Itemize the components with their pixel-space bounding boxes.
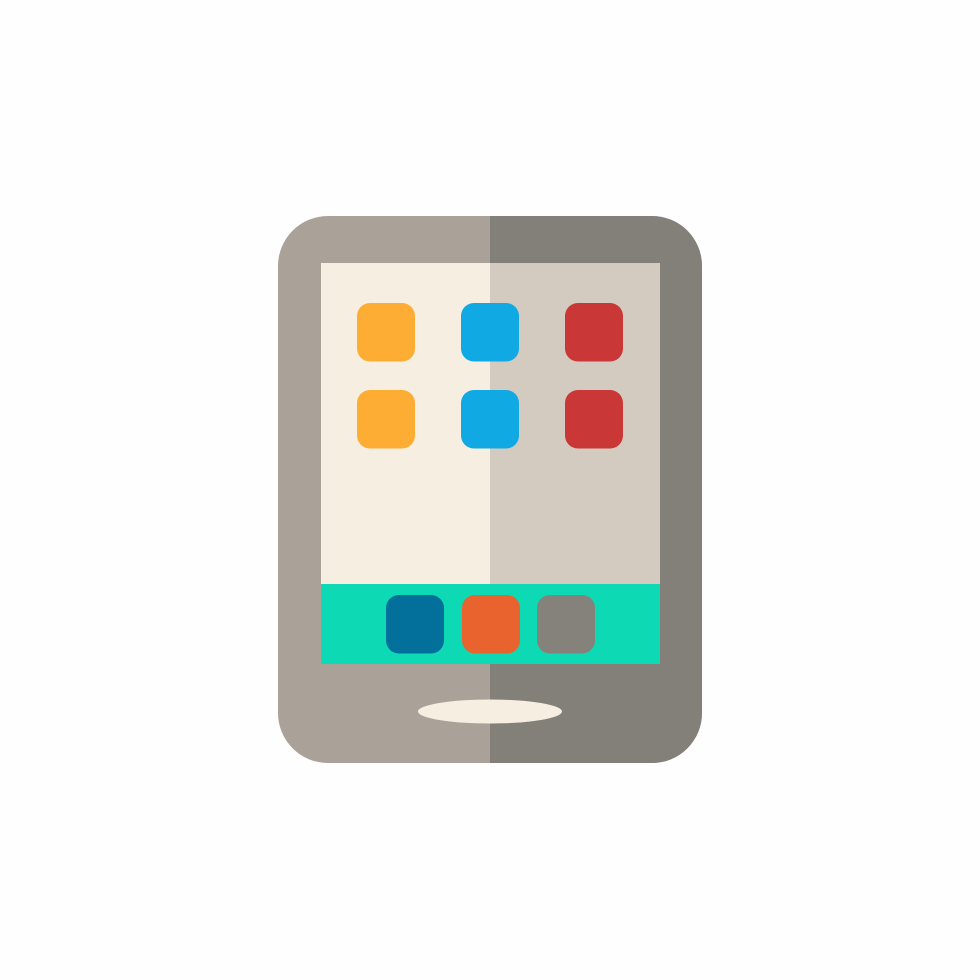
tablet screen xyxy=(321,263,660,584)
home button xyxy=(418,700,562,724)
app icons grid xyxy=(357,303,623,448)
tablet body xyxy=(278,216,702,763)
dock bar xyxy=(321,584,660,664)
